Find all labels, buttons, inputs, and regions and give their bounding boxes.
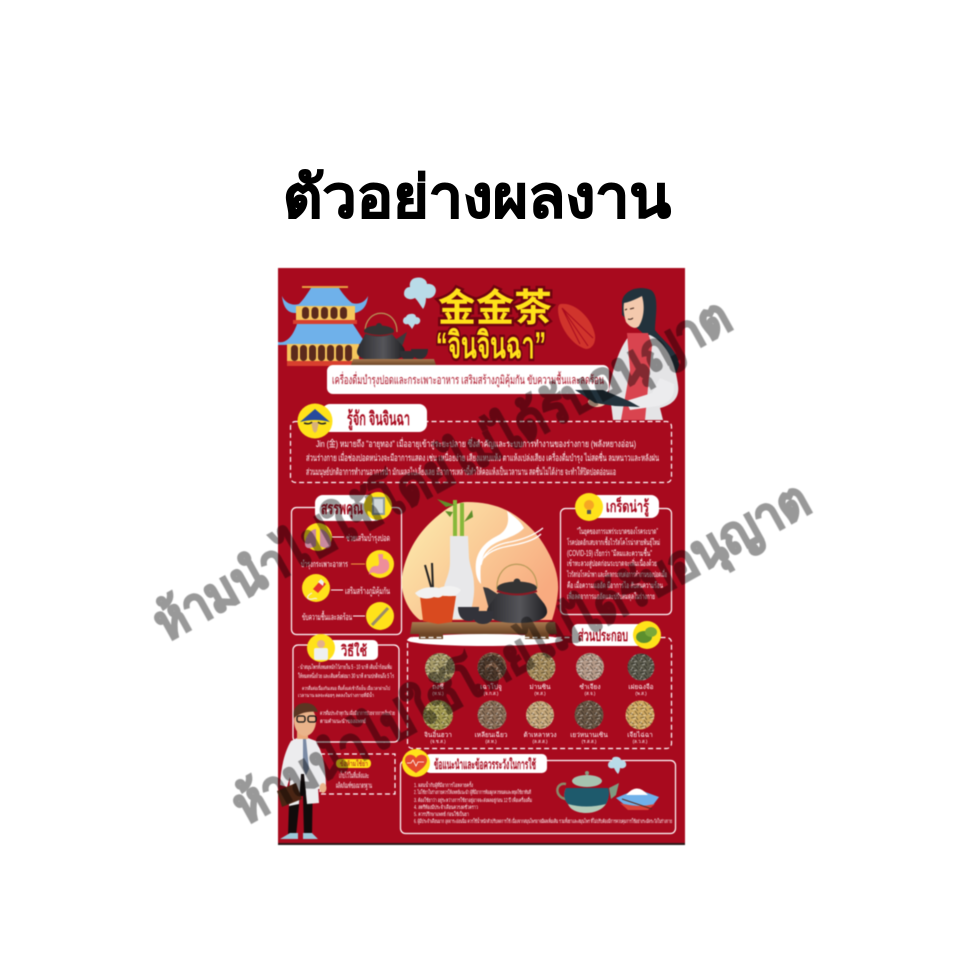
about body text: Jin (金) หมายถึง "อายุทอง" เมื่ออายุเข้าสู่ระยะปลาย ซึ่งสำคัญและระบบการทำงานของร่างกาย (พลังหยางอ่อน) [316,437,636,450]
advice list: 2. ไม่ใช้ยาในร่างกายควรให้แพทย์แนะนำ ผู้ที่มีอาการท้องผูกควรหมดและหยุดใช้ยาทันที [414,788,531,796]
benefit: stomach [301,550,394,578]
heading pill: advice: ข้อแนะนำและข้อควรระวังในการใช้ [434,756,536,772]
red takeaway box with chopsticks [415,563,461,624]
herb labels: เหลียนเฉียว [475,731,508,739]
icon: light bulb [575,493,603,521]
watermark: upper line: ห้ามนำไปใช้โดยไม่ได้รับอนุญาต [143,286,741,654]
herb labels: (ท.ส.) [534,691,546,696]
icon: red fan [558,304,595,349]
herb labels [424,683,654,744]
advice list: 6. ผู้มีประจำเดือนมาก อุจจาระอ่อนนิ่ม ควรใช้น้ำหนักตัวปรับลดการใช้ เนื่องจากสมุนไพรอาจมีผลเพิ่มเติม รวมทั้งยาและสมุนไพร ที่ไม่ปรับต้องมีการควบคุมการใช้อย่างระมัดระวังในร่างกาย [414,817,672,825]
tea cups [458,607,494,624]
heading pill: about: รู้จัก จินจินฉา [347,408,410,431]
herb labels: เฝยฉงจือ [628,683,654,691]
herb labels: (ส.ท.) [485,739,497,744]
icon: steam [608,757,626,774]
herb labels: (ล.ส.ส.) [532,739,548,744]
icon: herb leaves [633,621,661,649]
heading pill: benefits: สรรพคุณ [321,499,363,519]
trivia text: (COVID-19) เรียกว่า "มีลมและความชื้น" [567,547,652,558]
panel: benefits [292,492,402,634]
benefit: lungs [304,523,390,551]
usage text: - นำสมุนไพรทั้งหมดหมักไว้ภายใน 5 - 10 นาที เติมน้ำร้อนเพิ่ม [298,661,392,671]
peach blob [402,502,558,620]
icon: teal teapot [557,771,619,813]
panel: advice and precautions [400,749,676,834]
herb labels: เฉาโปจู [480,683,502,691]
illustration: doctor [277,703,326,839]
herb labels: (ส.จ.) [585,691,596,696]
poster [277,268,685,845]
heading pill: about [322,404,427,432]
poster background [278,268,685,845]
herb labels: เจียไฉ่ฉา [627,731,653,739]
heading: sample work: ตัวอย่างผลงาน [283,165,671,230]
herb labels: (ล.ว.ส.) [633,739,648,744]
herb labels: (จ.ก.ส.) [484,691,499,696]
caution text [336,770,372,790]
benefit: lungs: ช่วยเสริมบำรุงปอด [346,533,390,544]
usage text: ควรดื่มประจำทุกวัน เมื่อมีอาการป่วยจากการเจ็บป่วย [320,709,395,717]
advice list: 4. สตรีท้องมีประจำเดือนควรงดชั่วคราว [414,803,478,811]
icon: heart [402,749,430,777]
watermark: lower line: ห้ามนำไปใช้โดยไม่ได้รับอนุญาต [222,469,820,837]
advice list: 5. ควรปรึกษาแพทย์ ก่อนใช้เป็นยา [414,810,469,818]
trivia text: โรคปอดอักเสบจากเชื้อไวรัสโคโรน่าสายพันธุ์ใหม่ [567,536,660,547]
usage text: เวลานาน ผลจะค่อยๆ ลดลงในร่างกายที่มีน้ำ [298,690,374,699]
heading pill: advice [425,754,547,773]
heading pill: how to use: วิธีใช้ [341,642,367,660]
trivia text: เข้าทะลวงสู่ปอดก่อนระบาดจะเพิ่มเนื่องด้วย [567,557,657,569]
heading pill: ingredients: ส่วนประกอบ [578,628,628,645]
herb labels: (จ.ช.ส.) [430,739,446,744]
usage text: ตามคำแนะนำของแพทย์ [320,718,366,725]
icon: clipboard [364,492,392,520]
heading pill: trivia: เกร็ดน่ารู้ [606,495,649,518]
icon: small doctor [307,634,335,662]
poster bottom edge [278,843,685,845]
icon: bowl with chopsticks [616,788,659,810]
herb labels: ซำเจียง [579,683,601,691]
herb row one [425,652,654,683]
herb labels: (ห.ป.) [432,691,444,696]
heading pill: ingredients [572,624,648,646]
wooden tray [407,622,563,646]
herb labels: ถงซี [432,683,444,691]
panel: trivia: ไวรัสก่อโรคนำพา และมีผลกระทบต่อการทำงานของปอดเมื่อ [567,568,667,579]
benefit: immunity: เสริมสร้างภูมิคุ้มกัน [345,586,390,597]
white vase [443,536,474,619]
panel: caution box: ผลิตภัณฑ์ของมาตรฐาน [336,781,372,790]
herb labels: ต้าเหลาหวง [523,731,557,739]
title: chinese name: 金金茶 [438,277,552,332]
panel: trivia [560,493,672,614]
benefit: stomach: บำรุงกระเพาะอาหาร [301,559,348,570]
illustration: central tea set [402,499,563,646]
advice list: 3. ต้องใช้ยาว่า อยู่ระหว่างการใช้ยาอยู่อาจจะส่งผลอยู่ก่อน 12 ปี เพื่อเครื่องดื่ม [414,796,532,804]
usage text: ควรดื่มต่อเนื่องกันเสมอ ดื่มตั้งแต่เช้าถึงเย็น เมื่อเวลาผ่านไป [302,683,390,692]
usage text [298,661,395,725]
panel: ingredients [408,621,672,748]
illustration: woman with tablet [575,288,679,420]
benefit: thermometer [302,602,394,630]
heading pill: benefits [315,495,383,521]
white steam swirl [476,511,543,584]
usage text: ให้หมดหนึ่งถ้วย และเติมครั้งต่อมา 30 นาที ตามปกติจนถึง 5 ไร [298,670,394,680]
black teapot [483,564,547,623]
trivia text: เพื่อลดอาการแออัดและปรับสมดุลในร่างกาย [567,590,655,601]
herb labels: จินอิ๋นฮวา [424,730,452,739]
herb labels: ม่านซิน [529,683,551,691]
benefit: thermometer: ขับความชื้นและลดร้อน [302,610,352,622]
pagoda illustration [278,286,368,366]
trivia text: "ในยุคของการแพร่ระบาดของโรคระบาด" [577,526,658,536]
trivia text [567,526,667,601]
panel: caution box [320,754,395,794]
about body text [306,437,659,478]
subtitle banner: เครื่องดื่มบำรุงปอดและกระเพาะอาหาร เสริมสร้างภูมิคุ้มกัน ขับความชื้นและลดร้อน [332,371,604,388]
herb labels: (ร.ส.ส.) [582,739,597,744]
icon: top teapot with cups [351,313,436,369]
about body text: ส่วนร่างกาย เมื่อช่องปอดหน่วงจะมีอาการแสดง เช่น เหนื่อยง่าย เสียงแหบแห้ง ตาแห้งเปล่งเสียง เครื่องดื่มบำรุง ไม่สดชื่น ลมหนาวและหลังฝน [306,451,659,464]
benefit: immunity [302,574,390,602]
caution badge: ข้อห้ามใช้ยา [340,759,368,768]
subtitle banner [327,365,609,394]
advice list: 1. ผสมน้ำกับผู้ที่มีอาการไอหลายครั้ง [414,781,473,789]
about body text: ส่วนมนุษย์ปกติอาการทำงานอาการนำ มักเผลอไปเลี้ยงเลย มีอาการเหล่านี้ทำให้คอแห้งเป็นเวลานาน สดชื่นไม่ได้ง่าย จะทำให้ปิดปอดอ่อนแอ [306,465,616,478]
caution text: เก็บไว้ในที่แห้งและ [339,770,369,780]
herb labels: เยว่หนานเซิน [570,731,608,739]
trivia text: คือ เมื่อความแออัด มีอาการไอ สับสนความร้อน [567,579,663,590]
bamboo [437,499,473,556]
title: thai name: “จินจินฉา” [436,325,546,366]
icon: steam clouds [403,277,436,329]
advice list [414,781,672,825]
herb row two [423,700,654,730]
icon: hat character [298,404,332,438]
herb labels: (พ.ส.) [635,691,647,696]
panel: how to use [293,634,399,742]
section: about jin jin cha [290,404,672,482]
